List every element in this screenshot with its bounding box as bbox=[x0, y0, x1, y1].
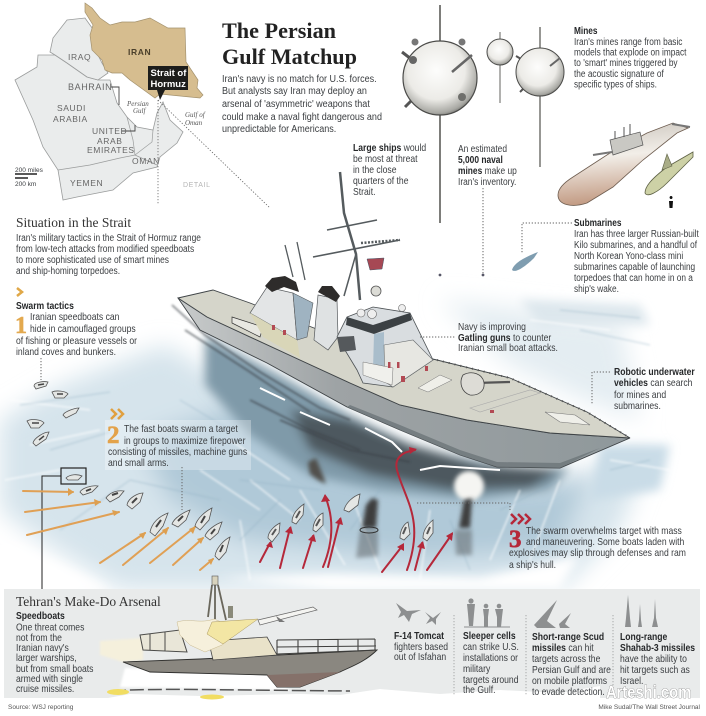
step 1: swarm tactics bbox=[15, 288, 138, 380]
mines text: Mines bbox=[574, 25, 597, 37]
Scud text: Persian Gulf and are bbox=[532, 664, 611, 676]
number 2: 2 bbox=[107, 422, 120, 449]
large ships text bbox=[353, 142, 426, 198]
sleeper cells text: targets around bbox=[463, 674, 518, 686]
intro text: But analysts say Iran may deploy an bbox=[222, 85, 367, 97]
step 1: swarm tactics: inland coves and bunkers. bbox=[16, 346, 116, 358]
intro text: arsenal of 'asymmetric' weapons that bbox=[222, 98, 370, 110]
robotic vehicles text with leader: for mines and bbox=[614, 389, 666, 401]
mines text: models that explode on impact bbox=[574, 47, 687, 59]
step 3: swarm overwhelms: a ship's hull. bbox=[509, 559, 556, 571]
intro text: Iran's navy is no match for U.S. forces. bbox=[222, 73, 377, 85]
naval mines text bbox=[458, 143, 517, 188]
large ships text: Large ships would bbox=[353, 142, 426, 154]
title: Gulf Matchup bbox=[222, 44, 357, 69]
Scud text bbox=[532, 631, 611, 698]
step 2: fast boats swarm: The fast boats swarm a target bbox=[124, 423, 238, 435]
map: Strait of Hormuz callout: Hormuz bbox=[150, 79, 186, 90]
speedboats text: Iranian navy's bbox=[16, 642, 69, 654]
large ships text: Strait. bbox=[353, 186, 375, 198]
speedboats text: not from the bbox=[16, 632, 62, 644]
intro text: could make a naval fight dangerous and bbox=[222, 111, 382, 123]
ship: forward funnel bbox=[314, 295, 338, 350]
naval mines text: Iran's inventory. bbox=[458, 176, 516, 188]
Scud text: to evade detection. bbox=[532, 686, 605, 698]
large ships text: be most at threat bbox=[353, 153, 418, 165]
artist credit: Mike Sudal/The Wall Street Journal bbox=[598, 704, 701, 711]
gatling guns text with leader bbox=[420, 321, 558, 354]
speedboats text bbox=[16, 610, 94, 695]
mines text: the acoustic signature of bbox=[574, 68, 664, 80]
Shahab text: have the ability to bbox=[620, 653, 687, 665]
robotic vehicles text with leader bbox=[592, 366, 695, 412]
destroyer ship bbox=[178, 172, 630, 468]
step 3: swarm overwhelms: and maneuvering. Some boats laden with bbox=[526, 536, 684, 548]
map: country labels: Persian bbox=[126, 100, 149, 108]
ship: mast and yardarms bbox=[285, 172, 400, 300]
speedboats text: but from small boats bbox=[16, 663, 94, 675]
map: country labels: SAUDI bbox=[57, 103, 86, 113]
step 1: swarm tactics: of fishing or pleasure vessels or bbox=[16, 335, 138, 347]
submarines text: Kilo submarines, and a handful of bbox=[574, 239, 697, 251]
situation paragraph: Iran's military tactics in the Strait of Hormuz range bbox=[16, 232, 201, 244]
Shahab text: Israel. bbox=[620, 675, 643, 687]
map: scale bar bbox=[15, 167, 44, 188]
submarines text: Submarines bbox=[574, 217, 621, 229]
naval mines text: An estimated bbox=[458, 143, 507, 155]
naval mines text: mines make up bbox=[458, 165, 517, 177]
sleeper cells text: the Gulf. bbox=[463, 684, 496, 696]
section heading: situation in the strait: Situation in the Strait bbox=[16, 215, 131, 230]
mine: large bbox=[402, 5, 477, 223]
sleeper cells text: installations or bbox=[463, 652, 519, 664]
speedboats text: larger warships, bbox=[16, 652, 77, 664]
speedboats text: One threat comes bbox=[16, 622, 85, 634]
map: country labels: Oman bbox=[185, 119, 203, 127]
naval mines leader and markers bbox=[439, 188, 484, 276]
icon: person for scale bbox=[669, 196, 673, 208]
step 2: fast boats swarm: and small arms. bbox=[108, 457, 169, 469]
speedboat illustration bbox=[100, 576, 377, 700]
Scud text: Short-range Scud bbox=[532, 631, 604, 643]
map: leader lines bbox=[111, 87, 135, 131]
intro text: unpredictable for Americans. bbox=[222, 123, 336, 135]
icon: Scud launchers bbox=[534, 600, 571, 628]
Scud text: on mobile platforms bbox=[532, 675, 607, 687]
speedboats text: armed with single bbox=[16, 673, 83, 685]
step 3: swarm overwhelms: explosives may slip through defenses and ram bbox=[509, 547, 686, 559]
F-14 text: F-14 Tomcat bbox=[394, 630, 445, 642]
step 1: swarm tactics: Iranian speedboats can bbox=[30, 311, 119, 323]
Scud text: targets across the bbox=[532, 653, 600, 665]
large ships text: in the close bbox=[353, 164, 397, 176]
watermark: Arteshi.com bbox=[606, 683, 691, 702]
map: Iran bbox=[85, 3, 203, 98]
Shahab text bbox=[620, 631, 695, 687]
gatling guns text with leader: Navy is improving bbox=[458, 321, 526, 333]
step 2: fast boats swarm: in groups to maximize firepower bbox=[124, 435, 246, 447]
icon: sleeper cell figures bbox=[464, 598, 510, 627]
title: The Persian bbox=[222, 18, 336, 43]
idle hidden boats bbox=[27, 382, 79, 446]
map: country labels: DETAIL bbox=[183, 182, 211, 189]
map: Iraq bbox=[50, 18, 108, 80]
small submarine in sea with leader bbox=[512, 223, 572, 271]
map of the Persian Gulf region bbox=[15, 3, 270, 208]
number 3: 3 bbox=[509, 526, 522, 553]
step 1: swarm tactics: Swarm tactics bbox=[16, 300, 74, 312]
gatling guns text with leader: Gatling guns to counter bbox=[458, 332, 552, 344]
icon: double chevrons bbox=[111, 409, 123, 419]
explosions and smoke bbox=[308, 458, 484, 558]
panel: Tehran's make-do arsenal bbox=[4, 576, 700, 700]
ship: deck bbox=[178, 290, 630, 438]
step 2: fast boats swarm bbox=[105, 409, 251, 510]
situation paragraph: and ship-homing torpedoes. bbox=[16, 265, 120, 277]
ship: deck details bbox=[272, 325, 494, 413]
Shahab text: Long-range bbox=[620, 631, 667, 643]
number 1: 1 bbox=[15, 313, 27, 339]
mine: medium bbox=[516, 27, 564, 167]
sleeper cells text: Sleeper cells bbox=[463, 630, 516, 642]
F-14 text bbox=[394, 630, 448, 663]
divider lines bbox=[454, 615, 613, 695]
icon: flag bbox=[367, 258, 384, 270]
ship: aft superstructure bbox=[250, 287, 297, 340]
map: country labels: ARAB bbox=[97, 136, 123, 146]
map: country labels: IRAN bbox=[128, 47, 151, 57]
sleeper cells text bbox=[463, 630, 519, 696]
map: country labels: EMIRATES bbox=[87, 145, 135, 155]
Scud text: missiles can hit bbox=[532, 642, 594, 654]
map: country labels bbox=[53, 47, 211, 189]
ship: bow gun bbox=[418, 373, 590, 425]
large ships text: quarters of the bbox=[353, 175, 408, 187]
icon: chevron bbox=[17, 288, 22, 296]
map: Strait of Hormuz callout: Strait of bbox=[150, 68, 187, 79]
robotic vehicles text with leader: submarines. bbox=[614, 400, 661, 412]
speedboats text: Speedboats bbox=[16, 610, 65, 622]
Shahab text: Shahab-3 missiles bbox=[620, 642, 695, 654]
mines text: specific types of ships. bbox=[574, 79, 657, 91]
speedboats text: cruise missiles. bbox=[16, 683, 74, 695]
red arrows and boats bbox=[260, 447, 453, 572]
F-14 text: out of Isfahan bbox=[394, 651, 446, 663]
map: country labels: Gulf bbox=[133, 107, 146, 115]
submarines text: North Korean Yono-class mini bbox=[574, 250, 683, 262]
map: scale bar: 200 km bbox=[15, 181, 36, 188]
icon: Shahab missiles bbox=[625, 595, 658, 627]
map: Arabian peninsula bbox=[15, 55, 183, 200]
sea wash bbox=[0, 300, 670, 590]
robotic vehicles text with leader: Robotic underwater bbox=[614, 366, 695, 378]
submarine: Yono bbox=[645, 152, 693, 195]
naval mines text: 5,000 naval bbox=[458, 154, 503, 166]
mines text: to 'smart' mines triggered by bbox=[574, 57, 678, 69]
mines text bbox=[574, 25, 687, 91]
mine: small bbox=[487, 32, 513, 103]
map: country labels: Gulf of bbox=[185, 111, 206, 119]
submarines illustration bbox=[558, 123, 693, 208]
sleeper cells text: military bbox=[463, 663, 490, 675]
map: country labels: ARABIA bbox=[53, 114, 88, 124]
submarine: Kilo bbox=[558, 123, 690, 205]
icon: triple chevrons bbox=[511, 514, 530, 524]
situation paragraph: to more sophisticated use of smart mines bbox=[16, 254, 169, 266]
ship: hull bbox=[178, 298, 630, 468]
submarines text: torpedoes that can home in on a bbox=[574, 272, 694, 284]
step 2: fast boats swarm: consisting of missiles, machine guns bbox=[108, 446, 247, 458]
map: Strait of Hormuz callout bbox=[148, 66, 188, 100]
situation paragraph bbox=[16, 232, 201, 277]
map: scale bar: 200 miles bbox=[15, 167, 44, 174]
mines text: Iran's mines range from basic bbox=[574, 36, 683, 48]
step 3: swarm overwhelms bbox=[417, 503, 686, 571]
submarines text: Iran has three larger Russian-built bbox=[574, 228, 699, 240]
map: country labels: IRAQ bbox=[68, 52, 91, 62]
situation paragraph: from low-tech attacks from modified speedboats bbox=[16, 243, 194, 255]
orange arrows and attacking boats bbox=[23, 486, 230, 570]
F-14 text: fighters based bbox=[394, 641, 448, 653]
map: country labels: UNITED bbox=[92, 126, 127, 136]
map: country labels: BAHRAIN bbox=[68, 82, 112, 92]
zoom box and leader to speedboat panel bbox=[42, 468, 86, 590]
ship: forward superstructure bbox=[337, 307, 433, 387]
robotic vehicles text with leader: vehicles can search bbox=[614, 377, 692, 389]
sleeper cells text: can strike U.S. bbox=[463, 641, 519, 653]
panel heading: Tehran's Make-Do Arsenal bbox=[16, 594, 161, 609]
intro text bbox=[222, 73, 382, 135]
icon: F-14 fighters bbox=[396, 603, 441, 625]
map: country labels: OMAN bbox=[132, 156, 160, 166]
step 3: swarm overwhelms: The swarm overwhelms target with mass bbox=[526, 525, 682, 537]
step 1: swarm tactics: hide in camouflaged groups bbox=[30, 323, 136, 335]
mines illustration bbox=[402, 5, 564, 223]
Shahab text: hit targets such as bbox=[620, 664, 690, 676]
map: country labels: YEMEN bbox=[70, 178, 103, 188]
submarines text: ship's wake. bbox=[574, 283, 619, 295]
submarines text: submarines capable of launching bbox=[574, 261, 695, 273]
source credit: Source: WSJ reporting bbox=[8, 704, 74, 711]
gatling guns text with leader: Iranian small boat attacks. bbox=[458, 342, 558, 354]
submarines text bbox=[574, 217, 699, 295]
